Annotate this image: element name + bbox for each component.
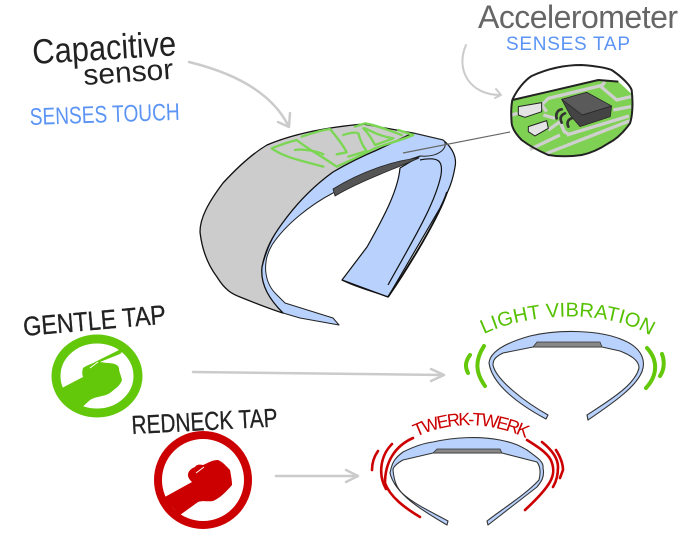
label: senses tap: SENSES TAP bbox=[506, 34, 630, 55]
illustration: light vibration band bbox=[489, 331, 643, 420]
inset outline bbox=[511, 65, 632, 156]
label: senses touch: SENSES TOUCH bbox=[29, 99, 180, 131]
band inner blue far side bbox=[342, 133, 456, 297]
heading: accelerometer: Accelerometer bbox=[478, 0, 678, 35]
chip pins bbox=[556, 109, 572, 127]
small components bbox=[518, 103, 542, 117]
board traces bbox=[512, 82, 631, 154]
capacitive sensor trace bbox=[272, 123, 413, 167]
band grey outer surface bbox=[200, 124, 413, 313]
vibration marks: green bbox=[466, 346, 664, 388]
vibration marks: red bbox=[372, 438, 563, 517]
heading: capacitive sensor bbox=[31, 24, 177, 92]
arrow: gentle tap to light vibration bbox=[193, 369, 444, 381]
green circuit board bbox=[512, 80, 632, 156]
chip body bbox=[562, 92, 612, 127]
arrow: redneck tap to twerk bbox=[276, 470, 358, 482]
arrow: capacitive sensor to band bbox=[189, 62, 290, 127]
label: light vibration: LIGHT VIBRATION bbox=[480, 302, 656, 335]
heading: capacitive sensor: sensor bbox=[82, 54, 175, 92]
dark slot bbox=[333, 158, 419, 196]
icon: green pointing hand bbox=[56, 339, 138, 413]
display slot bbox=[533, 342, 602, 347]
heading: redneck tap: REDNECK TAP bbox=[131, 402, 278, 440]
band blue front edge bbox=[261, 133, 445, 325]
icon: red fist bbox=[158, 435, 248, 525]
display slot bbox=[433, 449, 502, 453]
label: twerk-twerk: TWERK-TWERK bbox=[412, 412, 530, 438]
heading: gentle tap: GENTLE TAP bbox=[22, 300, 167, 342]
leader line bbox=[403, 132, 510, 153]
illustration: twerk band bbox=[390, 438, 544, 525]
heading: capacitive sensor: Capacitive bbox=[31, 24, 177, 72]
arrow: accelerometer to chip bbox=[462, 45, 501, 98]
chip inset circle bbox=[511, 65, 632, 156]
inner contour lines bbox=[388, 159, 442, 285]
illustration: wristband bbox=[200, 123, 456, 325]
